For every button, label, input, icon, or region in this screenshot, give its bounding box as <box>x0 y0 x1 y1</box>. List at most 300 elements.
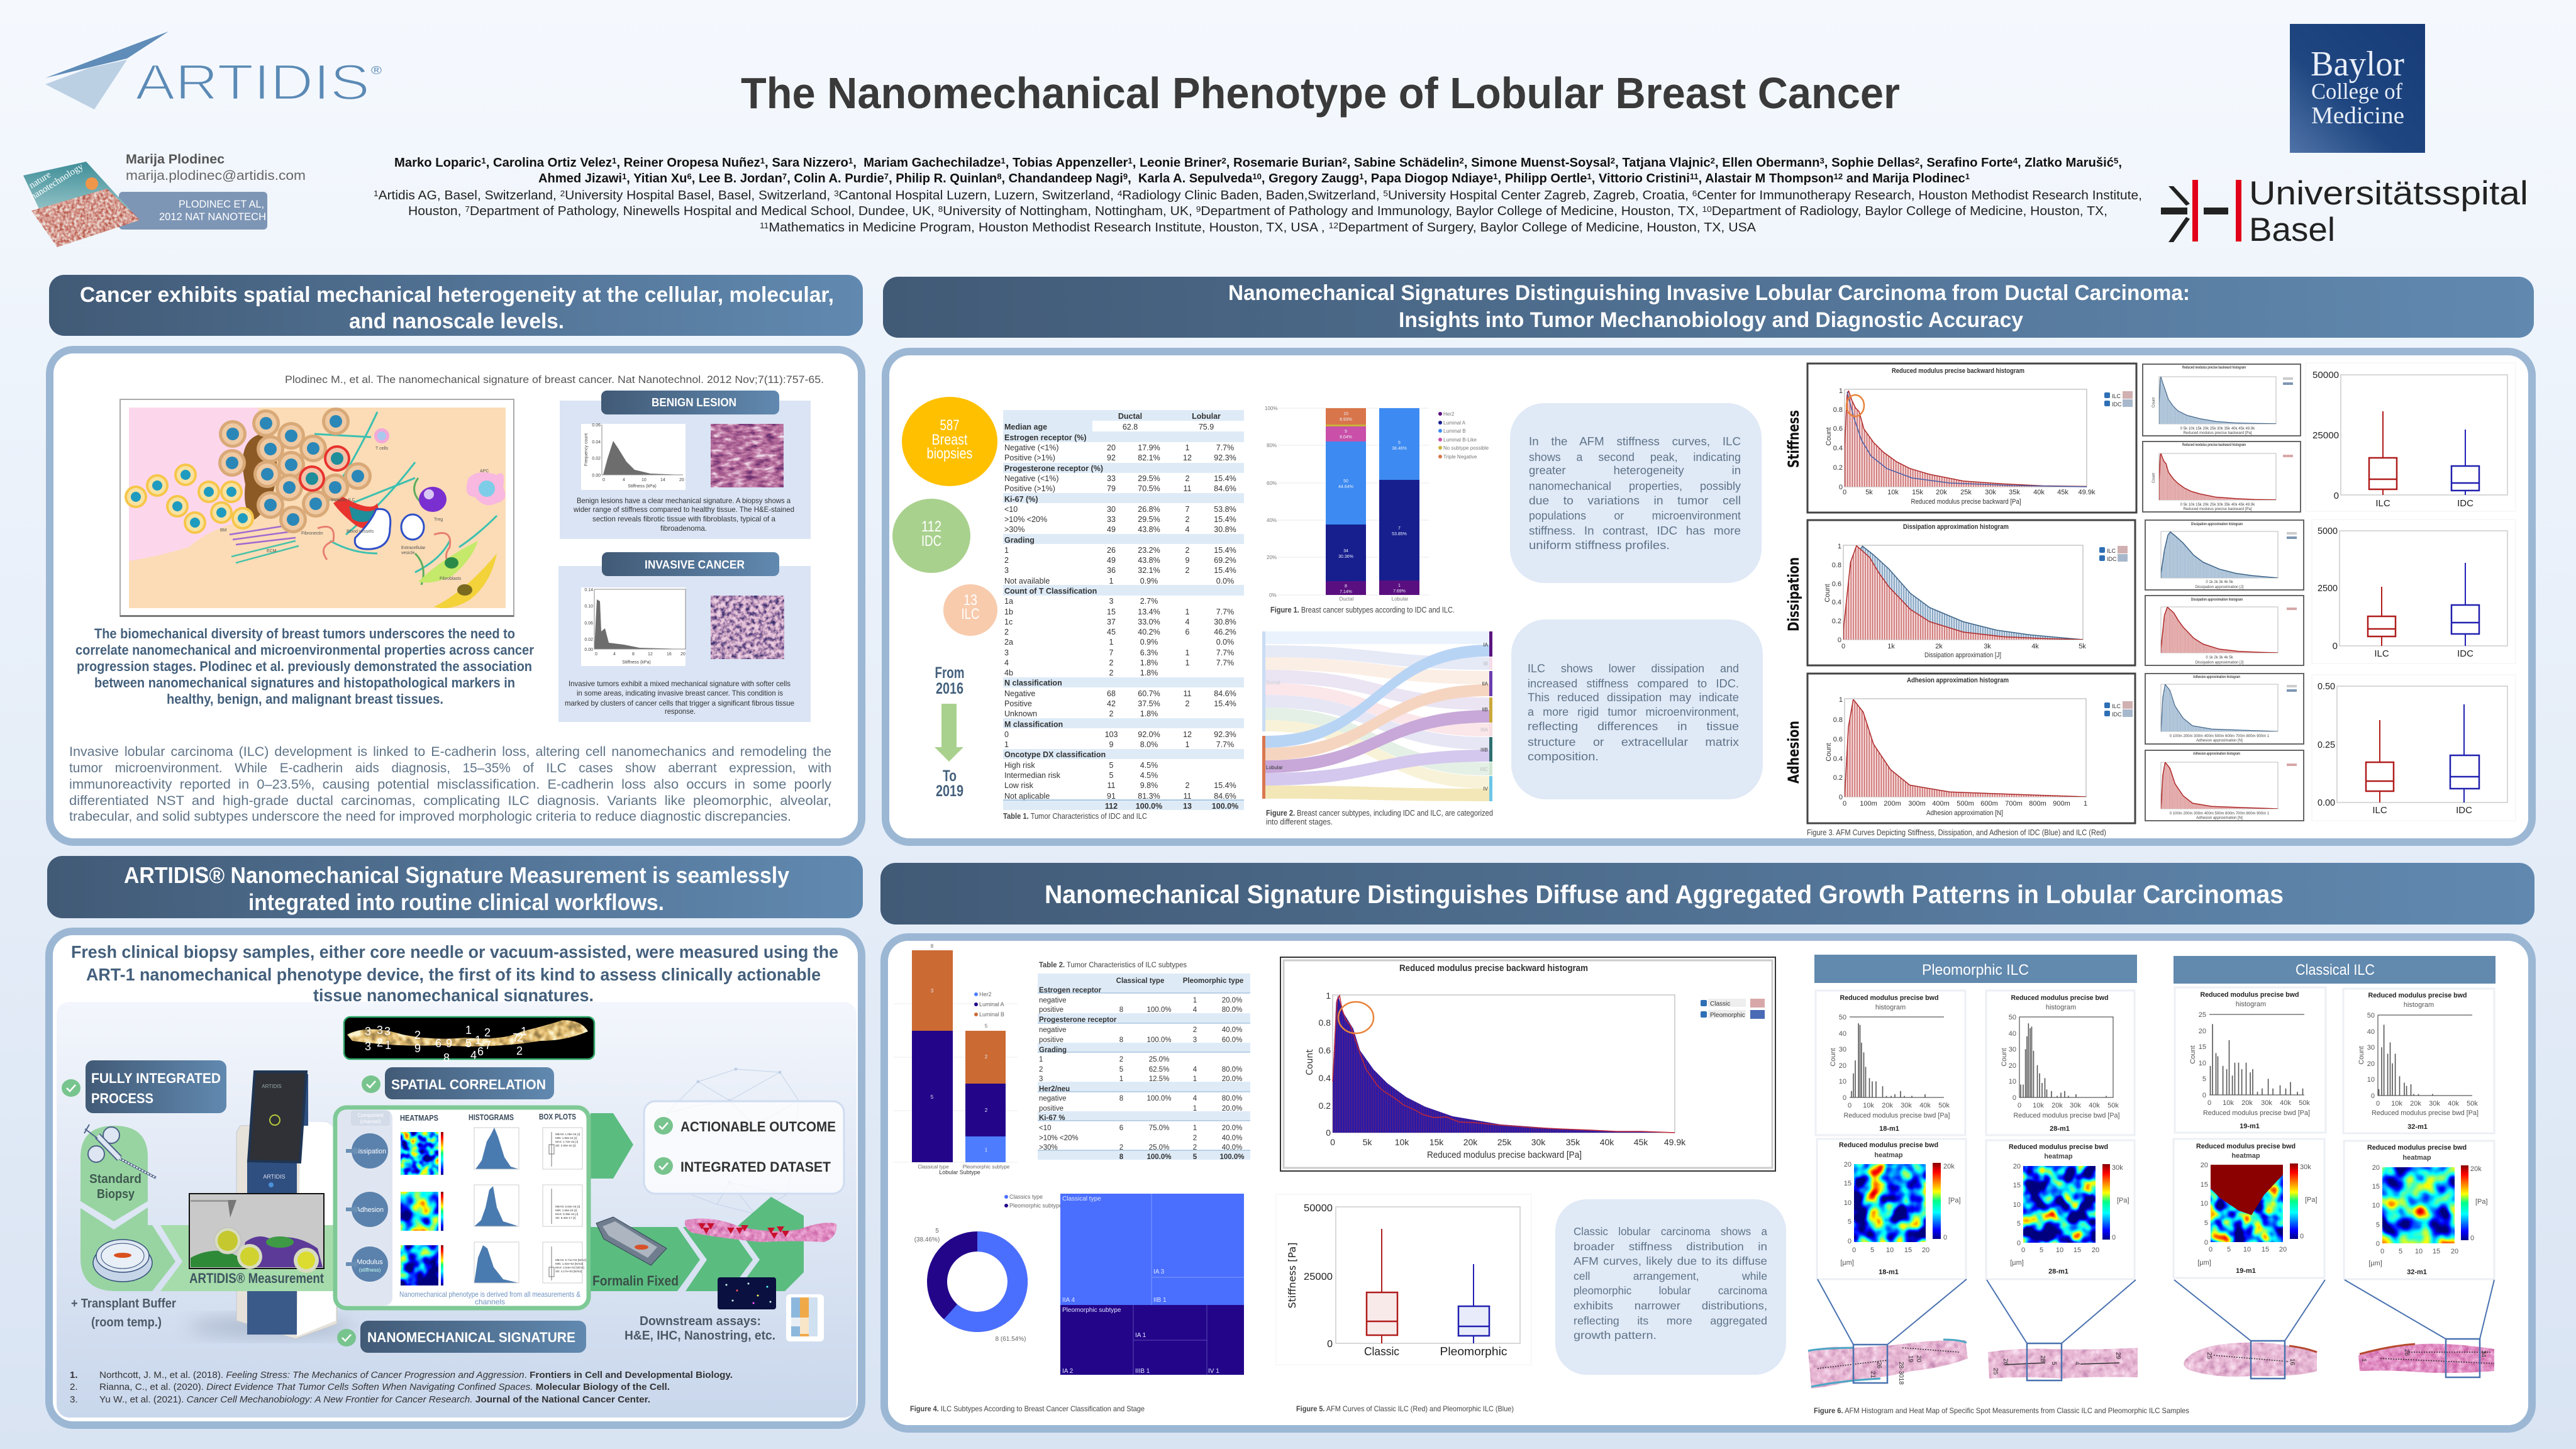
histogram card: 32-m1: 40 <box>2367 1028 2375 1036</box>
chart: adhesion histogram overlay: Count <box>1825 743 1833 762</box>
table 2: tumor characteristics of ILC subtypes: 2 <box>1039 1066 1043 1074</box>
invasive caption: marked by clusters of cancer cells that trigger a significant fibrous tissue <box>565 699 794 708</box>
biopsy image: spatial map: 5 <box>465 1037 472 1050</box>
biopsy strip: 19-m1 <box>2174 1280 2325 1379</box>
chart: stiffness histogram ILC: Reduced modulus precise backward [Pa] <box>2183 508 2252 511</box>
chart: adhesion histogram overlay: 1 <box>1839 696 1843 704</box>
biopsy image: spatial map: 8 <box>443 1052 450 1064</box>
table 1: tumor characteristics of IDC and ILC: 29.5% <box>1138 474 1160 483</box>
caption: figure 2 <box>1266 808 1493 826</box>
chart: adhesion histogram overlay: 700m <box>2005 800 2023 808</box>
chart: stiffness histogram overlay: 45k <box>2057 489 2068 496</box>
table 2: tumor characteristics of ILC subtypes: 8 <box>1119 1095 1123 1102</box>
channel: dissipation: MIN: 1.80e-16 [J] <box>555 1136 577 1140</box>
tissue strip with spot markers <box>685 1219 836 1242</box>
chart: adhesion histogram ILC: Adhesion approximation [N] <box>2196 816 2243 820</box>
histogram card: 32-m1: Count <box>2358 1046 2365 1065</box>
header: classical ILC: Classical ILC <box>2296 962 2375 979</box>
chart: figure 1 stacked subtypes: 10 <box>1343 412 1348 416</box>
paragraph: ILC development: immunoreactivity reported in 0–23.5%, causing potential misclassification. E-cadherin loss also occurs in some poorly <box>69 777 832 792</box>
timeline: 2016 to 2019 <box>935 664 965 800</box>
box plot: adhesion: 0.00 <box>2318 797 2335 808</box>
table 1: tumor characteristics of IDC and ILC: 62.8 <box>1123 423 1138 431</box>
chart: stiffness histogram IDC: Reduced modulus precise backward histogram <box>2182 366 2246 370</box>
chart: lobular subtype stacked bars <box>893 943 1018 1175</box>
biopsy strip: 18-m1: 26 <box>1875 1362 1882 1369</box>
histogram: benign stiffness: 14 <box>660 478 665 482</box>
table 1: tumor characteristics of IDC and ILC: 1.8% <box>1140 709 1158 718</box>
table 2: tumor characteristics of ILC subtypes: 2 <box>1193 1144 1197 1152</box>
heatmap card: 18-m1: 0 <box>1848 1238 1852 1245</box>
chart: figure 2 sankey: IV <box>1483 786 1489 792</box>
histogram: invasive stiffness: 0.14 <box>584 588 593 592</box>
chart: figure 1 stacked subtypes: 100% <box>1265 406 1277 411</box>
table 1: tumor characteristics of IDC and ILC: 4b <box>1004 669 1013 677</box>
chart: stage treemap: IA 3 <box>1153 1269 1165 1275</box>
histogram card: 19-m1: 25 <box>2199 1011 2206 1019</box>
table 1: tumor characteristics of IDC and ILC: 60.7% <box>1138 689 1160 698</box>
chart: classic vs pleomorphic histogram: Reduced modulus precise backward [Pa] <box>1427 1150 1582 1160</box>
table 1: tumor characteristics of IDC and ILC: 3 <box>1004 566 1009 575</box>
histogram: benign stiffness: Frequency count <box>584 433 589 466</box>
chart: adhesion histogram overlay: 400m <box>1932 800 1950 808</box>
table 2: tumor characteristics of ILC subtypes: Estrogen receptor <box>1039 987 1102 994</box>
panel: workflow <box>49 931 862 1425</box>
table 1: tumor characteristics of IDC and ILC: 15.4% <box>1214 781 1236 790</box>
biopsy image: spatial map: 1 <box>385 1039 391 1052</box>
biopsy image: spatial map: 1 <box>475 1034 481 1046</box>
table 1: tumor characteristics of IDC and ILC: 20 <box>1107 443 1116 452</box>
histogram card: 32-m1: Reduced modulus precise bwd <box>2368 992 2467 999</box>
histogram card: 32-m1: 30 <box>2367 1044 2375 1052</box>
chart: figure 1 stacked subtypes: 60% <box>1267 480 1277 486</box>
biopsy strip: 28-m1 <box>1987 1280 2138 1380</box>
chart: adhesion histogram overlay: 0.4 <box>1833 755 1843 763</box>
table 2: tumor characteristics of ILC subtypes: 20.0% <box>1222 1075 1242 1083</box>
label: spatial correlation <box>362 1067 554 1099</box>
callout: ILC dissipation: reflecting differences in tissue <box>1528 720 1739 733</box>
chart: adhesion histogram overlay: 500m <box>1957 800 1974 808</box>
table 1: tumor characteristics of IDC and ILC: 5 <box>1109 771 1114 780</box>
chart: adhesion histogram overlay: 0 <box>1839 794 1843 801</box>
table 1: tumor characteristics of IDC and ILC: Not aplicable <box>1004 792 1050 801</box>
histogram card: 28-m1: 10k <box>2033 1102 2044 1109</box>
biopsy image: spatial map: 2 <box>414 1029 421 1041</box>
paragraph: ILC development: tumor microenvironment. While E-cadherin aids diagnosis, 15–35% of ILC cases show aberrant expression, with <box>69 761 831 775</box>
table 1: tumor characteristics of IDC and ILC: 2 <box>1185 781 1190 790</box>
heatmap card: 28-m1: 15 <box>2074 1246 2081 1254</box>
table 2: tumor characteristics of ILC subtypes: 40.0% <box>1222 1026 1242 1034</box>
chart: stiffness histogram overlay: 0.4 <box>1833 445 1843 452</box>
heatmap card: 32-m1 <box>2344 1141 2494 1279</box>
callout: AFM stiffness: stiffness. In contrast, IDC has more <box>1529 525 1741 537</box>
cohort bubble: 13 ILC: ILC <box>961 606 980 623</box>
chart: adhesion histogram IDC <box>2145 674 2304 744</box>
table 1: tumor characteristics of IDC and ILC: Negative <box>1004 689 1035 698</box>
histogram: benign stiffness: 0.04 <box>592 440 601 445</box>
biopsy strip: 28-m1: 28 <box>2039 1355 2046 1363</box>
heading: diffuse and aggregated growth <box>880 863 2534 924</box>
biopsy image: spatial map: 7 <box>485 1039 491 1052</box>
histogram: invasive stiffness: 8 <box>632 652 635 657</box>
panel: nanomechanical measurements: Component <box>357 1113 384 1118</box>
table 1: tumor characteristics of IDC and ILC: 7.7% <box>1216 608 1234 616</box>
table 1: tumor characteristics of IDC and ILC: Count of T Classification <box>1004 587 1097 596</box>
panel: nanomechanical measurements: (channel) <box>360 1119 381 1124</box>
chart: dissipation histogram overlay: IDC <box>2107 556 2117 562</box>
callout: classic lobular carcinoma: AFM curves, likely due to its diffuse <box>1574 1255 1767 1267</box>
callout: AFM stiffness: In the AFM stiffness curves, ILC <box>1529 435 1741 448</box>
table 1: tumor characteristics of IDC and ILC: <10 <box>1004 505 1018 514</box>
callout: AFM stiffness: nanomechanical properties, possibly <box>1529 480 1741 492</box>
histogram card: 32-m1: Reduced modulus precise bwd [Pa] <box>2372 1109 2479 1117</box>
heatmap card: 18-m1 <box>1817 1139 1966 1279</box>
chart: dissipation histogram overlay: 2k <box>1935 643 1943 650</box>
chart: stiffness histogram overlay: 0.2 <box>1833 464 1843 472</box>
chart: adhesion histogram IDC: Adhesion approximation histogram <box>2193 675 2240 679</box>
table 1: tumor characteristics of IDC and ILC: Low risk <box>1004 781 1034 790</box>
biopsy strip: 18-m1: 28-3018 <box>1897 1362 1904 1385</box>
table 1: tumor characteristics of IDC and ILC: 7 <box>1109 648 1114 657</box>
callout: AFM stiffness <box>1510 403 1762 583</box>
biopsy image: spatial map: 9 <box>446 1037 452 1050</box>
heading: signatures distinguishing ILC from ductal <box>883 277 2534 338</box>
heading: signatures distinguishing ILC from ductal: Nanomechanical Signatures Distinguishing Invasive Lobular Carcinoma from Ductal Carcinoma: <box>1228 281 2190 305</box>
benign caption: wider range of stiffness compared to healthy tissue. The H&E-stained <box>573 505 794 514</box>
biopsy strip: 32-m1: 1 <box>2360 1358 2367 1362</box>
heatmap card: 18-m1: 20k <box>1943 1163 1955 1170</box>
table 1: tumor characteristics of IDC and ILC: 11 <box>1184 484 1192 493</box>
box plot: classic vs pleomorphic: 25000 <box>1304 1272 1333 1282</box>
legend: donut: Classics type <box>1009 1194 1043 1200</box>
chart: classic vs pleomorphic histogram: 0.2 <box>1319 1101 1331 1111</box>
table 1: tumor characteristics of IDC and ILC: Median age <box>1004 423 1047 431</box>
chart: adhesion histogram overlay: Adhesion approximation [N] <box>1926 809 2003 817</box>
caption: figure 4: Figure 4. ILC Subtypes According to Breast Cancer Classification and Stage <box>910 1404 1145 1413</box>
histogram card: 18-m1: 30 <box>1839 1046 1846 1053</box>
table 1: tumor characteristics of IDC and ILC: 1 <box>1185 443 1190 452</box>
caption: figure 2: Figure 2. Breast cancer subtypes, including IDC and ILC, are categorized <box>1266 808 1493 818</box>
table 1: tumor characteristics of IDC and ILC: 1b <box>1004 608 1013 616</box>
table 1: tumor characteristics of IDC and ILC: 4 <box>1185 525 1190 534</box>
chart: stiffness histogram overlay: 5k <box>1865 489 1873 496</box>
heatmap card: 28-m1 <box>1986 1140 2135 1279</box>
chart: lobular subtype stacked bars: 1 <box>985 1147 988 1153</box>
box plot: stiffness: 50000 <box>2312 370 2339 380</box>
channel: adhesion: MIN: 1.56e-18 [J] <box>555 1209 577 1212</box>
channel: adhesion: MAX: 5.38e-16 [J] <box>555 1213 578 1216</box>
histogram card: 28-m1: Reduced modulus precise bwd <box>2011 994 2108 1002</box>
table 1: tumor characteristics of IDC and ILC: 2 <box>1185 699 1190 708</box>
panel: nanomechanical measurements <box>335 1108 589 1308</box>
chart: stiffness histogram overlay: 10k <box>1887 489 1899 496</box>
cohort bubble: 587 breast biopsies: Breast <box>932 431 968 448</box>
histogram card: 32-m1: 20k <box>2410 1100 2421 1108</box>
cohort bubble: 112 IDC: IDC <box>921 533 941 550</box>
histogram card: 19-m1: histogram <box>2236 1001 2266 1008</box>
text block: biomechanical diversity: The biomechanical diversity of breast tumors underscores the need to <box>94 626 515 641</box>
card: invasive cancer: INVASIVE CANCER <box>645 558 745 571</box>
text block: biomechanical diversity: between nanomechanical signatures and histopathological markers in <box>94 675 515 691</box>
biopsy strip: 19-m1: 25 <box>2206 1352 2212 1360</box>
chart: adhesion histogram overlay: 0.8 <box>1833 716 1843 724</box>
table 1: tumor characteristics of IDC and ILC: 7.7% <box>1216 740 1234 749</box>
references <box>70 1370 733 1405</box>
biopsy strip: 28-m1: 4 <box>2074 1362 2080 1365</box>
presenter contact: marija.plodinec@artidis.com <box>126 169 306 183</box>
chart: stage treemap: IA 1 <box>1135 1332 1146 1339</box>
illustration: tumor microenvironment: BM <box>220 528 227 533</box>
text block: biomechanical diversity <box>75 626 534 707</box>
device: ART-1 instrument <box>189 1072 352 1339</box>
table 2: tumor characteristics of ILC subtypes: 2 <box>1193 1026 1197 1034</box>
histogram card: 18-m1: 50 <box>1839 1014 1846 1021</box>
chart: stiffness histogram overlay: Count <box>1825 427 1833 446</box>
label: ARTIDIS measurement: ARTIDIS® Measurement <box>189 1270 325 1286</box>
chart: figure 2 sankey: IIA <box>1482 681 1489 687</box>
histogram card: 28-m1: 50 <box>2009 1014 2016 1021</box>
histogram card: 19-m1: 30k <box>2261 1099 2272 1107</box>
heatmap card: 19-m1: 19-m1 <box>2236 1267 2256 1275</box>
illustration: tumor microenvironment: vesicle <box>401 551 415 555</box>
caption: figure 1: Figure 1. Breast cancer subtypes according to IDC and ILC. <box>1270 605 1455 614</box>
table 1: tumor characteristics of IDC and ILC: 1c <box>1004 618 1013 626</box>
table 1: tumor characteristics of IDC and ILC: 2a <box>1004 638 1013 647</box>
flow arrows: formalin fixed to downstream <box>591 1197 804 1291</box>
table 2: tumor characteristics of ILC subtypes <box>1038 962 1250 1161</box>
histogram card: 28-m1: 30 <box>2009 1046 2016 1053</box>
table 2: tumor characteristics of ILC subtypes: 100.0% <box>1146 1095 1172 1102</box>
table 2: tumor characteristics of ILC subtypes: 4 <box>1193 1095 1197 1102</box>
histogram card: 28-m1: Count <box>2001 1048 2008 1067</box>
table 1: tumor characteristics of IDC and ILC: Lobular <box>1192 412 1221 421</box>
table 1: tumor characteristics of IDC and ILC: 33 <box>1107 515 1116 524</box>
heatmap card: 32-m1: 10 <box>2415 1248 2423 1255</box>
table 1: tumor characteristics of IDC and ILC: 23.2% <box>1138 546 1160 555</box>
table 1: tumor characteristics of IDC and ILC: 91 <box>1107 792 1116 801</box>
paragraph: ILC development: Invasive lobular carcinoma (ILC) development is linked to E-cadherin loss, altering cell nanomechanics and remodeling the <box>69 745 831 759</box>
histogram card: 19-m1: 0 <box>2202 1092 2206 1099</box>
callout: ILC dissipation: ILC shows lower dissipation and <box>1528 662 1739 675</box>
histogram card: 28-m1: 20 <box>2009 1062 2016 1070</box>
table 2: tumor characteristics of ILC subtypes: Her2/neu <box>1039 1085 1070 1093</box>
chart: figure 2 sankey: IIIB <box>1480 747 1488 753</box>
table 2: tumor characteristics of ILC subtypes: 1 <box>1039 1056 1043 1063</box>
chart: classic vs pleomorphic histogram: 30k <box>1531 1137 1546 1147</box>
table 1: tumor characteristics of IDC and ILC: 75.9 <box>1199 423 1214 431</box>
callout: AFM stiffness: populations or microenvironment <box>1529 509 1741 522</box>
chart: dissipation histogram ILC: 0 1k 2k 3k 4k 5k <box>2206 656 2234 660</box>
table 2: tumor characteristics of ILC subtypes: 1 <box>1193 1124 1197 1132</box>
heatmap card: 19-m1: 10 <box>2201 1200 2208 1208</box>
heatmap card: 28-m1: Reduced modulus precise bwd <box>2009 1143 2108 1151</box>
table 1: tumor characteristics of IDC and ILC: 11 <box>1184 792 1192 801</box>
table 1: tumor characteristics of IDC and ILC: 3 <box>1004 648 1009 657</box>
callout: classic lobular carcinoma: growth pattern. <box>1574 1329 1657 1341</box>
box plot: dissipation: 5000 <box>2318 526 2338 536</box>
heatmap card: 28-m1: heatmap <box>2044 1153 2073 1160</box>
table 1: tumor characteristics of IDC and ILC: 1 <box>1004 546 1009 555</box>
label: nanomechanical signature: NANOMECHANICAL SIGNATURE <box>367 1330 575 1345</box>
table 1: tumor characteristics of IDC and ILC: M classification <box>1004 720 1063 729</box>
paragraph: ILC development: differentiated NST and high-grade ductal carcinomas, complicating ILC diagnosis. Variants like pleomorphic, alveolar, <box>69 794 831 808</box>
table 1: tumor characteristics of IDC and ILC: 33.0% <box>1138 618 1160 626</box>
callout: AFM stiffness: shows a second peak, indicating <box>1529 451 1741 464</box>
table 2: tumor characteristics of ILC subtypes: 75.0% <box>1149 1124 1169 1132</box>
heading: clinical workflow: ARTIDIS® Nanomechanical Signature Measurement is seamlessly <box>124 862 789 888</box>
heatmap card: 28-m1: 28-m1 <box>2048 1268 2068 1275</box>
heading: spatial mechanical heterogeneity: and nanoscale levels. <box>349 309 564 333</box>
chart: dissipation histogram overlay: 5k <box>2079 643 2086 650</box>
table 1: tumor characteristics of IDC and ILC: 1.8% <box>1140 669 1158 677</box>
histogram card: 32-m1: 32-m1 <box>2407 1123 2428 1131</box>
table 2: tumor characteristics of ILC subtypes: negative <box>1039 1026 1066 1034</box>
table 1: tumor characteristics of IDC and ILC: 2 <box>1109 669 1114 677</box>
box plot: stiffness <box>2306 363 2516 511</box>
chart: adhesion histogram overlay: 200m <box>1884 800 1901 808</box>
heatmap card: 19-m1: 15 <box>2201 1181 2208 1189</box>
illustration: tumor microenvironment: Invasive ILC <box>331 498 355 502</box>
histogram card: 32-m1 <box>2343 989 2494 1133</box>
histogram: benign stiffness: 10 <box>641 478 647 482</box>
histogram card: 32-m1: 50k <box>2467 1100 2478 1108</box>
table 2: tumor characteristics of ILC subtypes: Pleomorphic type <box>1183 977 1243 985</box>
chart: figure 1 stacked subtypes: 8.04% <box>1340 435 1352 440</box>
heatmap card: 32-m1: 20 <box>2451 1248 2458 1255</box>
chart: stiffness histogram IDC <box>2143 364 2301 436</box>
biopsy strip: 18-m1: 21 <box>1869 1371 1876 1379</box>
table 1: tumor characteristics of IDC and ILC: 69.2% <box>1214 556 1236 565</box>
header: pleomorphic ILC <box>1814 955 2137 983</box>
table 2: tumor characteristics of ILC subtypes: 5 <box>1119 1066 1123 1074</box>
chart: classic vs pleomorphic histogram: 0 <box>1330 1137 1335 1147</box>
table 1: tumor characteristics of IDC and ILC: 0 <box>1004 730 1009 739</box>
chart: dissipation histogram overlay: 3k <box>1984 643 1991 650</box>
chart: dissipation histogram overlay: 0 <box>1841 643 1845 650</box>
chart: subtype donut <box>914 1228 1026 1343</box>
chart: classic vs pleomorphic histogram: 0 <box>1326 1128 1331 1138</box>
table 2: tumor characteristics of ILC subtypes: 5 <box>1193 1153 1197 1161</box>
table 2: tumor characteristics of ILC subtypes: 62.5% <box>1149 1066 1169 1074</box>
heatmap card: 28-m1: [Pa] <box>2117 1197 2129 1204</box>
table 1: tumor characteristics of IDC and ILC: 2 <box>1185 546 1190 555</box>
table 1: tumor characteristics of IDC and ILC: 46.2% <box>1214 628 1236 636</box>
biopsy image: spatial map <box>344 1017 594 1064</box>
table 1: tumor characteristics of IDC and ILC: 2 <box>1109 709 1114 718</box>
caption: figure 2: into different stages. <box>1266 817 1333 826</box>
table 1: tumor characteristics of IDC and ILC: 13.4% <box>1138 608 1160 616</box>
references: 1. <box>70 1370 78 1380</box>
journal cover with citation tag: PLODINEC ET AL, <box>179 198 264 210</box>
heatmap card: 18-m1: [Pa] <box>1948 1197 1961 1204</box>
chart: dissipation histogram ILC: Dissipation approximation histogram <box>2191 598 2243 602</box>
chart: classic vs pleomorphic histogram: 25k <box>1497 1137 1512 1147</box>
header: pleomorphic ILC: Pleomorphic ILC <box>1922 962 2029 979</box>
histogram card: 32-m1: histogram <box>2404 1001 2434 1009</box>
histogram card: 32-m1: 0 <box>2376 1100 2380 1108</box>
histogram card: 19-m1: 40k <box>2280 1099 2291 1107</box>
table 1: tumor characteristics of IDC and ILC: 15.4% <box>1214 474 1236 483</box>
row label: adhesion: Adhesion <box>1785 721 1802 784</box>
flow shape: transplant buffer dish <box>80 1208 333 1291</box>
channel: dissipation: Dissipation <box>353 1148 386 1155</box>
table 1: tumor characteristics of IDC and ILC: 17.9% <box>1138 443 1160 452</box>
chart: lobular subtype stacked bars: Luminal B <box>979 1011 1004 1018</box>
chart: dissipation histogram overlay: ILC <box>2107 548 2116 554</box>
histogram card: 28-m1: 28-m1 <box>2050 1125 2070 1133</box>
heatmap card: 32-m1: 10 <box>2372 1202 2380 1209</box>
channel: adhesion <box>346 1185 582 1231</box>
table 1: tumor characteristics of IDC and ILC: 30.8% <box>1214 618 1236 626</box>
histogram card: 32-m1: 10 <box>2367 1076 2375 1084</box>
table 2: tumor characteristics of ILC subtypes: >30% <box>1039 1144 1058 1152</box>
histogram card: 19-m1: Reduced modulus precise bwd [Pa] <box>2203 1109 2310 1117</box>
logo: Baylor College of Medicine: Baylor <box>2311 45 2404 84</box>
chart: stiffness histogram overlay: 0 <box>1843 489 1846 496</box>
chart: figure 1 stacked subtypes: 7.69% <box>1393 589 1406 594</box>
table 1: tumor characteristics of IDC and ILC: High risk <box>1004 761 1035 770</box>
table 1: tumor characteristics of IDC and ILC: 112 <box>1105 802 1118 811</box>
table 2: tumor characteristics of ILC subtypes: 1 <box>1193 1075 1197 1083</box>
chart: figure 1 stacked subtypes: Lobular <box>1392 596 1409 602</box>
chart: dissipation histogram overlay: 1 <box>1838 543 1841 550</box>
histogram: invasive stiffness: 0.00 <box>584 648 593 652</box>
chart: adhesion histogram IDC: 0 100m 200m 300m 400m 500m 600m 700m 800m 900m 1 <box>2170 735 2270 738</box>
text block: biomechanical diversity: progression stages. Plodinec et al. previously demonstrated the association <box>77 658 532 674</box>
table 1: tumor characteristics of IDC and ILC: Positive (>1%) <box>1004 453 1055 462</box>
callout: ILC dissipation: composition. <box>1528 750 1599 763</box>
table 1: tumor characteristics of IDC and ILC: >10% <20% <box>1004 515 1047 524</box>
channel: dissipation <box>346 1128 582 1175</box>
illustration: tumor microenvironment: Extracellular <box>401 546 426 550</box>
card: invasive cancer <box>558 552 811 722</box>
cohort bubble: 13 ILC <box>943 584 997 636</box>
image: expression heatmap <box>786 1294 824 1341</box>
histogram: invasive stiffness: 4 <box>613 652 616 657</box>
heatmap card: 18-m1: 0 <box>1943 1234 1947 1241</box>
biopsy image: spatial map: 3 <box>377 1024 383 1036</box>
chart: dissipation histogram overlay: 4k <box>2031 643 2039 650</box>
chart: dissipation histogram overlay: 0.8 <box>1832 562 1841 569</box>
biopsy image: spatial map: 6 <box>435 1037 441 1050</box>
histogram: benign stiffness: 20 <box>679 478 684 482</box>
table 1: tumor characteristics of IDC and ILC: Ductal <box>1118 412 1142 421</box>
chart: stiffness histogram ILC: Reduced modulus precise backward histogram <box>2182 443 2246 447</box>
table 1: tumor characteristics of IDC and ILC: 36 <box>1107 566 1116 575</box>
table 1: tumor characteristics of IDC and ILC: 15 <box>1107 608 1116 616</box>
biopsy image: spatial map: 3 <box>384 1025 391 1038</box>
chart: dissipation histogram overlay: Count <box>1824 584 1831 602</box>
invasive caption <box>565 679 794 716</box>
chart: figure 1 stacked subtypes: Her2 <box>1443 411 1455 417</box>
table 2: tumor characteristics of ILC subtypes: 60.0% <box>1222 1036 1242 1044</box>
chart: figure 2 sankey: Lobular <box>1266 765 1283 770</box>
table 1: tumor characteristics of IDC and ILC: 5 <box>1109 761 1114 770</box>
table 2: tumor characteristics of ILC subtypes: 100.0% <box>1219 1153 1245 1161</box>
heatmap card: 28-m1: 10 <box>2013 1201 2021 1209</box>
cohort bubble: 587 breast biopsies: biopsies <box>927 445 972 462</box>
chart: stiffness histogram overlay: 30k <box>1985 489 1996 496</box>
flow shape: standard biopsy <box>80 1124 156 1221</box>
heatmap card: 19-m1: 5 <box>2204 1219 2208 1227</box>
histogram card: 19-m1: 20k <box>2241 1099 2253 1107</box>
box plot: dissipation: 2500 <box>2318 583 2338 594</box>
biopsy strip: 28-m1: 25 <box>1992 1368 1999 1375</box>
panel: nanomechanical measurements: HEATMAPS <box>400 1114 438 1123</box>
box plot: adhesion <box>2312 675 2516 821</box>
heatmap card: 18-m1: 20 <box>1922 1246 1929 1254</box>
chart: adhesion histogram overlay <box>1807 674 2135 823</box>
